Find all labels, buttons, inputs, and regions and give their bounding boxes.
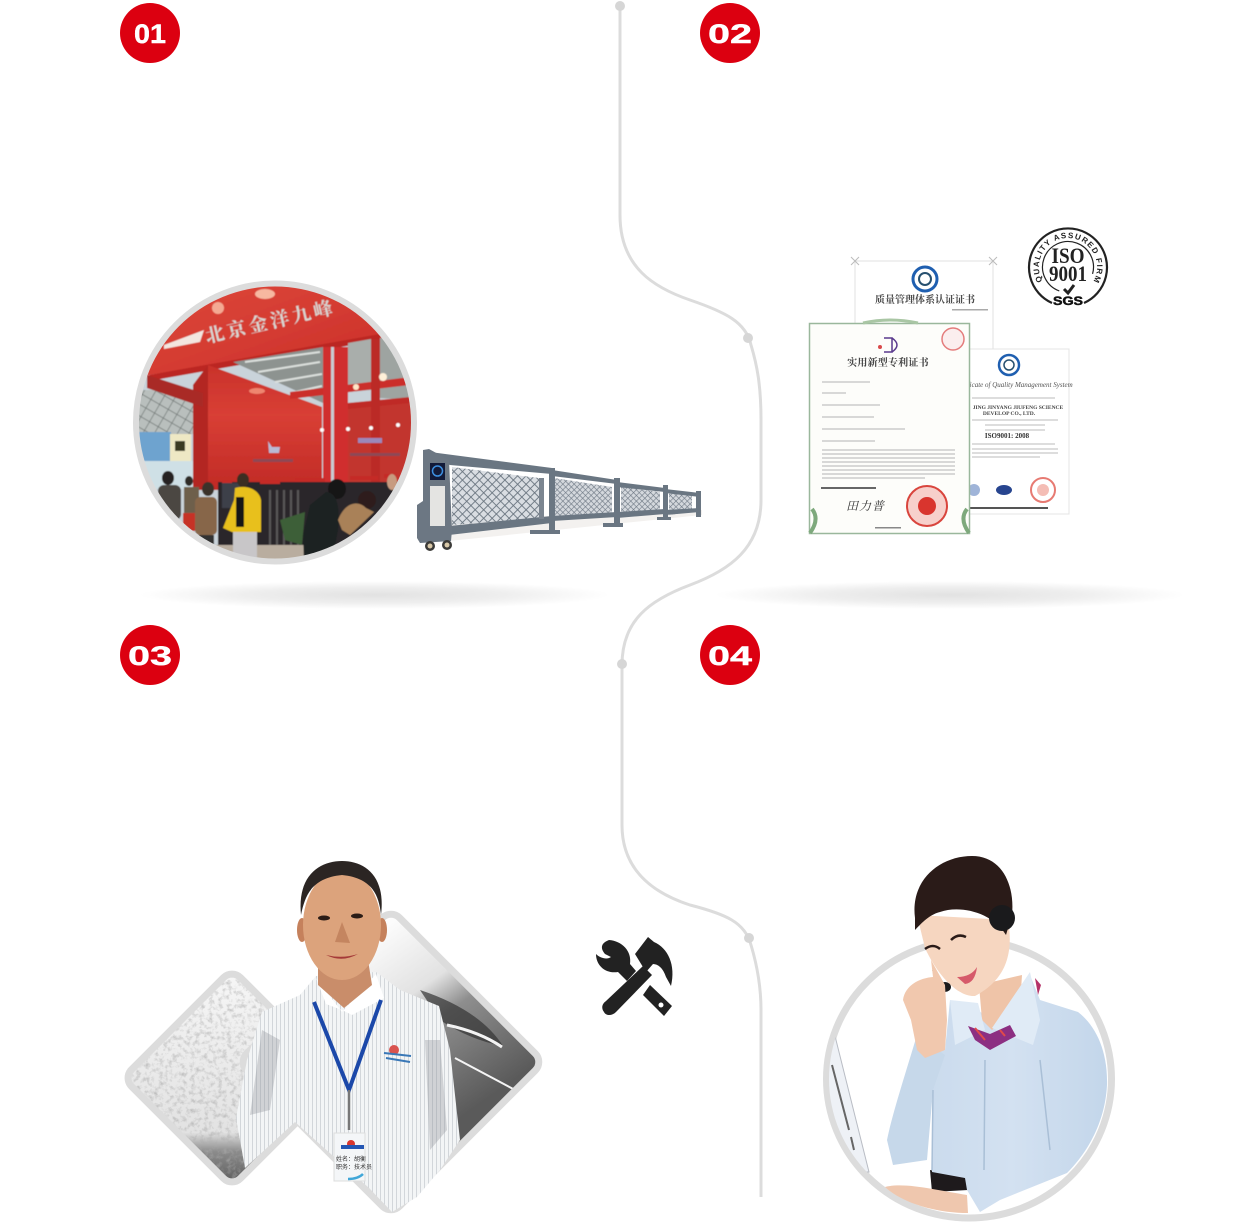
floor	[216, 544, 336, 558]
badge 03	[120, 625, 180, 685]
red left wall	[193, 365, 322, 490]
man id badge: 姓名：胡衡	[336, 1155, 366, 1163]
timeline connector line	[615, 1, 761, 1197]
booth wall logos	[268, 441, 280, 453]
computer monitor	[825, 1036, 869, 1172]
badge: ISO 9001 SGS: ISO	[1052, 243, 1084, 268]
collar	[950, 972, 1040, 1045]
certificate: ISO9001: DEVELOP CO., LTD.	[983, 411, 1036, 417]
booth title text: 北京金洋九峰	[203, 296, 335, 348]
shadow under panel 01	[140, 581, 610, 609]
badge: ISO 9001 SGS: SGS	[1053, 296, 1083, 308]
badge 04	[700, 625, 760, 685]
truss background	[139, 390, 194, 434]
visitor in dark jacket	[328, 479, 346, 499]
technician portrait group	[120, 861, 550, 1220]
certificate: ISO9001: ISO9001: 2008	[985, 432, 1030, 440]
customer service agent	[825, 856, 1112, 1218]
gate mesh panels	[452, 467, 692, 525]
shadow under panel 02	[715, 581, 1185, 609]
man arm shadows	[250, 1030, 447, 1150]
product: sliding electric gate	[417, 449, 702, 551]
visitor in yellow jacket	[237, 473, 249, 487]
visitor in tan jacket	[358, 492, 376, 508]
certificate: quality system	[851, 257, 997, 351]
forearm and hand at keyboard	[885, 1185, 968, 1213]
diamond left	[124, 970, 298, 1186]
exhibition signs	[135, 432, 171, 462]
neck	[979, 975, 1022, 1030]
hair	[914, 856, 1012, 935]
trouser at waist	[930, 1170, 975, 1192]
man id badge	[334, 1133, 372, 1181]
headset earpiece	[989, 905, 1015, 931]
certificate: ISO9001	[953, 349, 1073, 514]
certificate: quality system: 质量管理体系认证证书	[875, 293, 976, 306]
badge: ISO 9001 SGS	[1028, 227, 1108, 308]
man id badge: 职务：技术员	[336, 1163, 372, 1171]
man lanyard	[314, 1000, 381, 1090]
face	[917, 915, 1010, 996]
red pillars	[323, 347, 348, 497]
badge 03: 03	[128, 641, 172, 671]
certificate: ISO9001: JING JINYANG JIUFENG SCIENCE	[973, 405, 1064, 411]
shirt body	[917, 975, 1107, 1212]
certificate: utility model patent: 实用新型专利证书	[847, 356, 930, 369]
certificate: ISO9001: Certificate of Quality Management System	[953, 381, 1073, 389]
badge: ISO 9001 SGS: QUALITY ASSURED FIRM	[1034, 232, 1103, 283]
badge 01	[120, 3, 180, 63]
man head	[297, 861, 387, 980]
certificate: utility model patent	[810, 320, 970, 534]
visitors left	[162, 471, 174, 485]
badge 01: 01	[134, 19, 166, 49]
man neck	[318, 960, 372, 1008]
certificate: utility model patent: 田力普	[846, 499, 885, 513]
left sleeve	[887, 1035, 945, 1165]
gate frame	[430, 452, 701, 535]
raised hand	[903, 960, 947, 1058]
badge 04: 04	[708, 641, 752, 671]
badge 02: 02	[708, 19, 752, 49]
booth header beam	[147, 286, 382, 376]
certificates group	[808, 227, 1108, 534]
icon: wrench and hammer	[596, 937, 672, 1016]
microphone	[933, 970, 951, 992]
photo: exhibition booth	[135, 280, 415, 565]
eyes and mouth	[925, 936, 977, 984]
red right wall and beams	[348, 402, 412, 490]
shirt logo	[384, 1045, 411, 1062]
gate wheels	[425, 540, 452, 551]
scarf	[968, 1025, 1016, 1050]
ring	[826, 940, 1112, 1218]
gate products	[217, 481, 398, 546]
man shirt	[236, 972, 460, 1212]
diamond right	[240, 910, 542, 1214]
gate control post	[417, 449, 452, 543]
ceiling	[233, 347, 323, 403]
gate display	[430, 463, 445, 480]
gate white panel	[430, 486, 445, 526]
badge: ISO 9001 SGS: 9001	[1049, 261, 1087, 286]
badge 02	[700, 3, 760, 63]
